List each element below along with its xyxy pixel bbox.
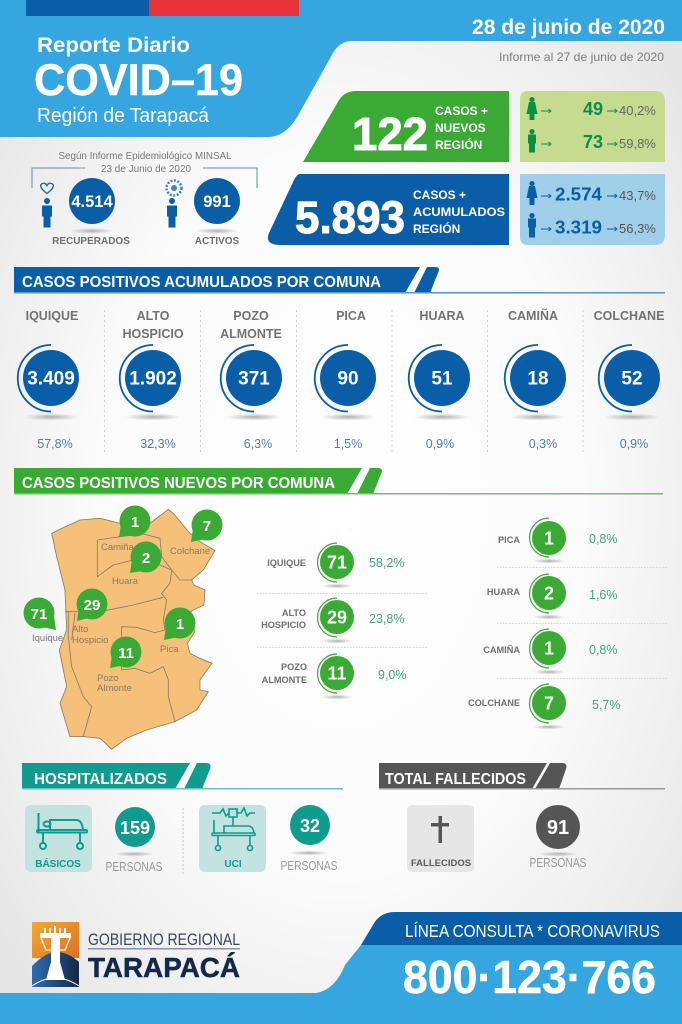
- new cases: Camiña: CAMIÑA: [483, 645, 520, 655]
- map of communes: Almonte: [97, 683, 132, 694]
- new cases: Colchane: COLCHANE: [468, 698, 520, 708]
- map pin: Iquique: [24, 598, 56, 630]
- new cases: Pozo Almonte: 9,0%: [378, 668, 406, 682]
- new cases: Alto Hospicio: 29: [327, 608, 347, 628]
- commune: Huara: 51: [431, 368, 453, 390]
- logo wordmark: TARAPACÁ: [88, 952, 240, 983]
- commune: Pica: 1,5%: [334, 437, 362, 451]
- new cases: Pozo Almonte: 11: [327, 664, 347, 684]
- panel: ICU: UCI: [224, 859, 242, 870]
- panel: new cases: NUEVOS: [435, 121, 486, 135]
- commune: Pozo Almonte: [220, 309, 282, 451]
- MINSAL note: [32, 150, 257, 188]
- panel: new cases: CASOS +: [435, 104, 488, 118]
- map of communes: Pica: [160, 644, 179, 655]
- commune: Camiña: [505, 308, 566, 451]
- panel: accumulated cases: 5.893: [295, 192, 405, 243]
- commune: Alto Hospicio: 32,3%: [140, 437, 176, 451]
- panel: accumulated cases by sex: 3.319: [555, 216, 602, 238]
- panel: basic beds: [25, 805, 92, 872]
- panel: accumulated cases: [268, 174, 509, 245]
- heading: new by commune: CASOS POSITIVOS NUEVOS POR COMUNA: [22, 475, 335, 492]
- heading: hospitalized: HOSPITALIZADOS: [34, 771, 167, 788]
- panel: accumulated cases: ACUMULADOS: [413, 205, 505, 219]
- panel: new cases: REGIÓN: [435, 137, 482, 152]
- commune: Huara: 0,9%: [426, 437, 454, 451]
- map pin: Pica: [164, 608, 196, 640]
- panel: ICU: [199, 805, 266, 872]
- map of communes: Iquique: [32, 633, 63, 644]
- panel: new cases by sex: 73: [583, 132, 603, 152]
- commune: Camiña: 0,3%: [529, 437, 557, 451]
- recovered: RECUPERADOS: [52, 236, 130, 247]
- commune: Colchane: COLCHANE: [594, 309, 664, 323]
- date: 28 de junio de 2020: [472, 15, 665, 39]
- flag stripe: [26, 0, 299, 16]
- divider: [182, 808, 184, 876]
- basic beds count: PERSONAS: [106, 859, 163, 874]
- commune: Huara: HUARA: [419, 309, 465, 323]
- panel: accumulated cases by sex: 2.574: [555, 184, 603, 204]
- map of communes: Alto: [72, 624, 88, 635]
- logo wordmark: GOBIERNO REGIONAL: [88, 930, 240, 949]
- ICU count: 32: [300, 816, 320, 836]
- map pin: Alto Hospicio: [76, 588, 108, 621]
- commune: Huara: [409, 309, 470, 451]
- deaths count: PERSONAS: [530, 855, 587, 870]
- active: 991: [203, 193, 231, 211]
- logo wordmark: [88, 930, 240, 983]
- commune: Colchane: 0,9%: [620, 437, 648, 451]
- new cases: Pica: [498, 518, 618, 564]
- map pin: Iquique: 71: [31, 606, 47, 623]
- new cases: Colchane: 5,7%: [592, 698, 620, 712]
- commune: Iquique: [18, 309, 79, 451]
- commune: Alto Hospicio: [120, 309, 184, 451]
- map of communes: Huara: [112, 576, 139, 587]
- map of communes: Pozo: [97, 673, 119, 684]
- deaths count: 91: [547, 817, 569, 839]
- new cases: Iquique: 71: [327, 552, 347, 572]
- commune: Colchane: [594, 309, 664, 451]
- commune: Pica: 90: [337, 368, 359, 390]
- panel: new cases: [303, 91, 509, 162]
- new cases: Pica: 1: [544, 528, 554, 548]
- commune: Iquique: 57,8%: [37, 437, 73, 451]
- MINSAL note: Según Informe Epidemiológico MINSAL: [58, 150, 232, 162]
- heading: accumulated by commune: CASOS POSITIVOS ACUMULADOS POR COMUNA: [22, 274, 381, 291]
- panel: basic beds: BÁSICOS: [35, 857, 81, 870]
- heading: deaths: TOTAL FALLECIDOS: [385, 771, 526, 788]
- commune: Colchane: 52: [621, 368, 643, 390]
- new cases: Pozo Almonte: POZO: [281, 662, 307, 672]
- new cases: Camiña: [483, 629, 618, 674]
- basic beds count: 159: [120, 818, 150, 838]
- title: Región de Tarapacá: [37, 105, 210, 127]
- ICU count: PERSONAS: [280, 858, 338, 873]
- heading: accumulated by commune: [14, 267, 665, 294]
- map of communes: Hospicio: [72, 635, 108, 646]
- phone number: 800·123·766: [403, 951, 656, 1003]
- commune: Alto Hospicio: HOSPICIO: [122, 327, 184, 341]
- panel: new cases by sex: [520, 91, 665, 162]
- heading: hospitalized: [22, 763, 343, 790]
- title: [34, 33, 243, 127]
- new cases: Huara: 2: [544, 584, 554, 604]
- panel: new cases by sex: 49: [583, 99, 603, 119]
- map pin: Pozo Almonte: 11: [118, 645, 134, 662]
- recovered: [41, 178, 130, 247]
- new cases: Iquique: 58,2%: [369, 556, 404, 570]
- ICU count: [280, 805, 338, 873]
- new cases: Iquique: [267, 543, 404, 588]
- commune dividers: [104, 310, 583, 455]
- recovered: 4.514: [71, 193, 113, 211]
- consultation line heading: [361, 912, 682, 945]
- active: [166, 178, 240, 247]
- heading: deaths: [379, 763, 665, 790]
- map of communes: [32, 509, 215, 749]
- deaths count: [530, 805, 587, 870]
- map pin: Camiña: [119, 506, 150, 537]
- footer band: [0, 912, 682, 1024]
- report note: Informe al 27 de junio de 2020: [499, 50, 664, 64]
- new cases: Huara: HUARA: [487, 587, 520, 597]
- new cases: Pozo Almonte: ALMONTE: [262, 675, 307, 685]
- map of communes: Camiña: [101, 542, 134, 553]
- commune: Alto Hospicio: ALTO: [137, 309, 170, 323]
- header band: [0, 0, 682, 137]
- new cases: Huara: 1,6%: [589, 588, 618, 602]
- map pin: Alto Hospicio: 29: [84, 597, 100, 614]
- logo emblem: [32, 922, 79, 987]
- new cases: Alto Hospicio: HOSPICIO: [261, 620, 306, 630]
- map pin: Huara: 2: [142, 550, 150, 567]
- map pin: Colchane: [191, 510, 222, 542]
- new cases: Pozo Almonte: [262, 654, 406, 700]
- map pin: Pica: 1: [176, 616, 184, 633]
- commune: Iquique: IQUIQUE: [26, 309, 78, 323]
- commune: Pozo Almonte: POZO: [233, 309, 269, 323]
- new cases: Pica: PICA: [498, 535, 520, 545]
- panel: deaths icon: FALLECIDOS: [411, 858, 471, 869]
- commune: Pozo Almonte: 371: [238, 368, 270, 390]
- panel: accumulated cases: REGIÓN: [413, 221, 460, 236]
- new cases: Alto Hospicio: ALTO: [282, 608, 306, 618]
- panel: accumulated cases by sex: [520, 174, 665, 245]
- map pin: Pozo Almonte: [110, 636, 142, 668]
- panel: accumulated cases by sex: 56,3%: [619, 221, 656, 236]
- map pin: Camiña: 1: [131, 514, 139, 531]
- new cases: Alto Hospicio: [261, 598, 404, 644]
- heading: new by commune: [14, 468, 663, 494]
- panel: deaths icon: [407, 805, 474, 872]
- commune: Alto Hospicio: 1.902: [129, 368, 177, 390]
- new-case row dividers: [257, 568, 667, 678]
- title: Reporte Diario: [37, 33, 190, 57]
- panel: accumulated cases: CASOS +: [413, 188, 466, 202]
- new cases: Huara: [487, 574, 618, 620]
- commune: Pica: [315, 309, 376, 451]
- commune: Camiña: CAMIÑA: [508, 308, 558, 323]
- title: COVID–19: [34, 56, 243, 105]
- basic beds count: [106, 807, 163, 874]
- commune: Iquique: 3.409: [27, 368, 75, 390]
- new cases: Colchane: [468, 684, 620, 730]
- panel: new cases by sex: 59,8%: [619, 136, 656, 151]
- new cases: Alto Hospicio: 23,8%: [369, 612, 404, 626]
- map pin: Colchane: 7: [203, 518, 211, 535]
- new cases: Iquique: IQUIQUE: [267, 558, 306, 568]
- new cases: Colchane: 7: [544, 694, 554, 714]
- panel: accumulated cases by sex: 43,7%: [619, 188, 656, 203]
- map pin: Huara: [130, 542, 162, 573]
- map of communes: Colchane: [170, 546, 210, 557]
- new cases: Camiña: 1: [544, 638, 554, 658]
- MINSAL note: 23 de Junio de 2020: [101, 163, 191, 175]
- commune: Pica: PICA: [336, 309, 366, 323]
- commune: Pozo Almonte: 6,3%: [244, 437, 272, 451]
- commune: Camiña: 18: [527, 368, 549, 390]
- panel: new cases: 122: [352, 108, 428, 160]
- commune: Pozo Almonte: ALMONTE: [220, 327, 282, 341]
- panel: new cases by sex: 40,2%: [619, 103, 656, 118]
- new cases: Pica: 0,8%: [589, 532, 618, 546]
- active: ACTIVOS: [195, 236, 240, 247]
- new cases: Camiña: 0,8%: [589, 643, 618, 657]
